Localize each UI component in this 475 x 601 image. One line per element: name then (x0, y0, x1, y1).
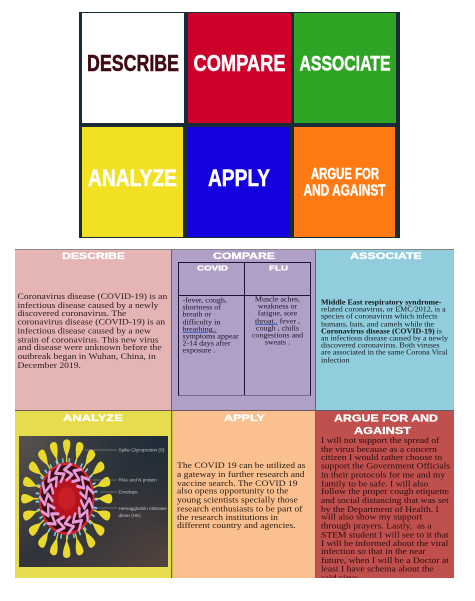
heading: compare: COMPARE (213, 251, 275, 262)
square: apply: APPLY (208, 165, 270, 192)
heading: associate: ASSOCIATE (350, 251, 422, 262)
text: flu symptoms: congestions and (252, 331, 303, 339)
square: describe: DESCRIBE (87, 50, 179, 76)
square: argue for and against (294, 127, 395, 237)
header: covid: COVID (196, 265, 228, 272)
text: describe body: infectious disease caused by a new (18, 326, 151, 336)
text: covid symptoms: symptoms appear (182, 332, 239, 340)
square: describe (82, 13, 184, 123)
text: describe body: infectious disease caused by a newly (18, 300, 158, 310)
text: flu symptoms: throat.. fever , (255, 317, 300, 325)
text: argue body: by the Department of Health. I (321, 505, 439, 514)
cube grid: six task squares (79, 12, 400, 238)
text: argue body: citizen I would rather choose to (321, 453, 442, 463)
panel: analyze (15, 411, 172, 578)
heading: describe: DESCRIBE (62, 251, 125, 262)
text: argue body: follow the proper cough etiquette (321, 487, 449, 497)
diagram labels: RNA and N protein (118, 478, 157, 482)
text: covid symptoms (182, 296, 239, 354)
header: flu: FLU (268, 265, 288, 272)
panel: associate (316, 249, 454, 411)
virus particle (21, 439, 112, 558)
text: argue body: I will not support the spread of (321, 436, 439, 446)
diagram labels (85, 448, 167, 518)
text: apply body: research enthusiasts to be part of (177, 504, 302, 513)
panel: apply (172, 411, 316, 578)
text: flu symptoms (252, 295, 303, 346)
image: coronavirus structure diagram (19, 436, 168, 567)
text: covid symptoms: -fever, cough, (182, 296, 227, 304)
text: flu symptoms: Muscle aches, (255, 295, 300, 303)
text: apply body: a gateway in further research and (177, 469, 305, 479)
heading: analyze: ANALYZE (63, 413, 123, 424)
diagram labels: Envelope (118, 490, 138, 494)
text: argue body: through prayers. Lastly, as a (321, 522, 431, 531)
text: covid symptoms: exposure . (182, 347, 215, 354)
text: describe body: and disease were unknown before the (18, 343, 162, 353)
text: argue body: will also show my support (321, 513, 422, 523)
text: describe body: discovered coronavirus. The (18, 309, 126, 318)
text: argue body: support the Government Officials (321, 462, 450, 471)
text: associate body: Middle East respiratory syndrome- (321, 298, 441, 306)
text: describe body: strain of coronavirus. This new virus (18, 334, 159, 344)
square: apply (188, 127, 290, 237)
text: associate body (321, 298, 448, 364)
text: argue body (321, 436, 450, 578)
text: describe body (18, 292, 168, 370)
panel: argue for and against (316, 411, 454, 578)
text: argue body: STEM student I will see to it that (321, 530, 449, 540)
diagram labels: dimer (HE) (118, 513, 141, 518)
panel: compare (172, 249, 316, 411)
text: describe body: coronavirus disease (COVID-19) is an (18, 317, 165, 327)
text: flu symptoms: weakness or (258, 302, 297, 310)
text: apply body: the research institutions in (177, 512, 278, 522)
square: compare: COMPARE (194, 50, 286, 76)
text: apply body (177, 461, 305, 530)
text: associate body: discovered coronavirus. Both viruses (321, 341, 440, 349)
panel: describe (15, 249, 172, 411)
diagram labels: Hemagglutinin esterase (118, 506, 167, 511)
square: analyze (82, 127, 183, 237)
text: argue body: I will be informed about the viral (321, 539, 448, 548)
comparison table (178, 262, 311, 396)
text: argue body: family to be safe. I will also (321, 479, 428, 489)
text: apply body: also opens opportunity to the (177, 486, 288, 496)
text: argue body: and social distancing that was set (321, 496, 449, 506)
text: argue body: least I have schema about the (321, 564, 434, 574)
table column divider (244, 262, 245, 394)
text: apply body: young scientists specially those (177, 495, 298, 505)
text: flu symptoms: fatigue, sore (258, 310, 297, 317)
heading: apply: APPLY (224, 413, 266, 424)
square: associate (294, 13, 396, 123)
text: associate body: species of coronavirus which infects (321, 313, 437, 320)
text: argue body: future, when I will be a Doctor at (321, 556, 449, 566)
text: argue body: the virus because as a concern (321, 445, 437, 454)
text: covid symptoms: 2-14 days after (182, 339, 230, 347)
text: covid symptoms: shortness of (182, 303, 221, 311)
text: associate body: Coronavirus disease (COVID-19) is (321, 327, 442, 335)
text: associate body: infection (321, 356, 349, 364)
heading: argue for and against: ARGUE FOR AND (334, 414, 438, 424)
text: associate body: related coronavirus, or EMC/2012, is a (321, 305, 446, 313)
text: argue body: infection so that in the near (321, 547, 426, 557)
text: describe body: Coronavirus disease (COVID-19) is an (18, 292, 167, 301)
text: covid symptoms: difficulty in (182, 318, 220, 326)
square: analyze: ANALYZE (88, 165, 177, 192)
text: apply body: vaccine search. The COVID 19 (177, 478, 298, 487)
text: describe body: outbreak began in Wuhan, China, in (18, 351, 156, 361)
text: associate body: humans, bats, and camels while the (321, 320, 434, 328)
text: apply body: The COVID 19 can be utilized as (177, 461, 305, 470)
text: flu symptoms: cough , chills (256, 324, 299, 332)
heading: argue for and against (334, 414, 438, 437)
table header rule (178, 294, 310, 296)
square: compare (188, 13, 291, 123)
text: flu symptoms: sweats . (265, 338, 290, 346)
text: covid symptoms: breath or (182, 311, 211, 318)
text: covid symptoms: breathing.. (182, 325, 217, 333)
text: describe body: December 2019. (18, 360, 81, 370)
diagram labels: Spike Glycoprotein (S) (118, 448, 165, 452)
text: associate body: are associated in the same Corona Viral (321, 349, 447, 356)
text: apply body: different country and agencies. (177, 521, 296, 530)
text: associate body: an infectious disease caused by a newly (321, 334, 448, 342)
text: argue body: in their protocols for me and my (321, 470, 445, 480)
heading: argue for and against: AGAINST (354, 426, 411, 437)
